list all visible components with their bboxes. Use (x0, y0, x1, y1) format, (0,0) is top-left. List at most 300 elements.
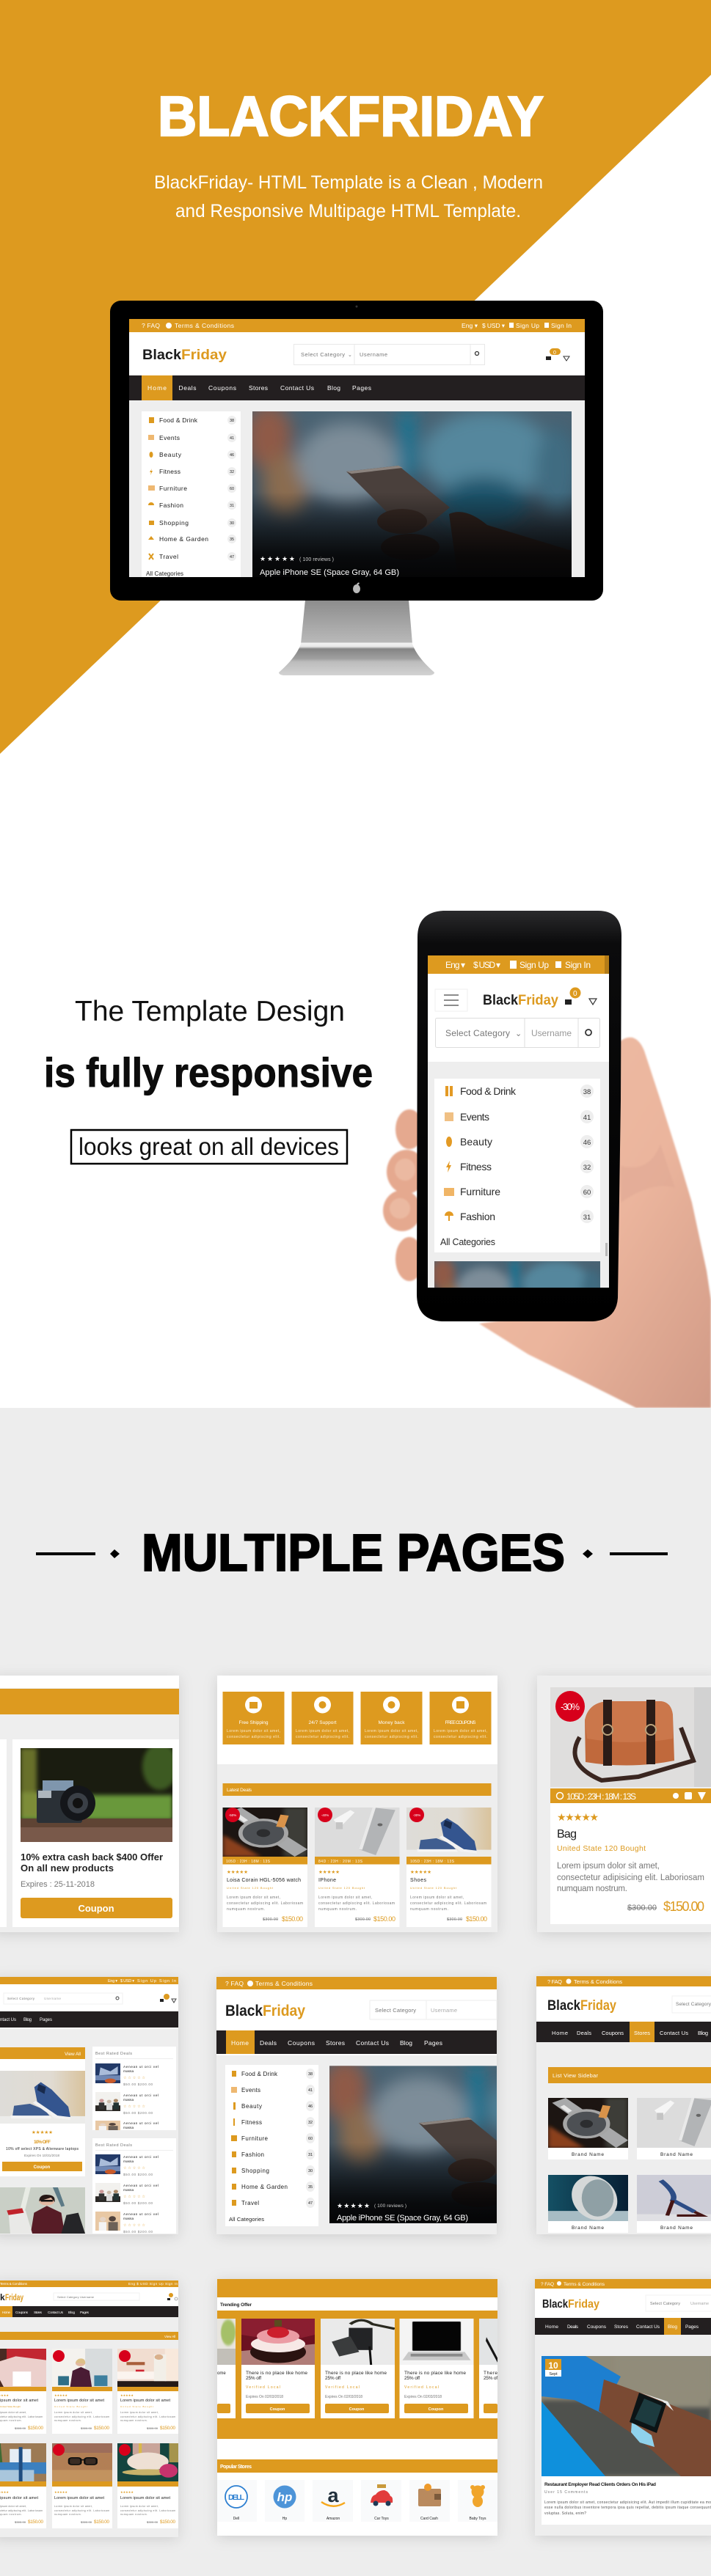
deal card: watch: 105D : 23H : 18M : 13S (226, 1860, 271, 1864)
deal card: watch: numquam nostrum. (227, 1907, 265, 1912)
phone category list: 46 (583, 1139, 591, 1147)
gold bar view all: View All (65, 2052, 81, 2057)
phone header: 0 (573, 990, 577, 998)
product info: United State 120 Bought (557, 1844, 646, 1853)
phone category list: 31 (583, 1214, 591, 1222)
coupon card: On all new products (21, 1863, 114, 1874)
category sidebar: Food & Drink (159, 417, 198, 424)
nav: Contact Us (660, 2030, 688, 2036)
gold bar (0, 2332, 178, 2340)
nav: Coupons (288, 2039, 315, 2047)
deal cards row 2: $150.00 (94, 2520, 109, 2525)
blog post card: voluptas. Soluta, enim? (544, 2511, 586, 2516)
offer card: dslr: Expires On 02/03/2018 (325, 2395, 362, 2399)
phone header (435, 987, 597, 1011)
best rated deals card 1: Aenean ut orci vel (123, 2094, 158, 2098)
navigation bar: Blog (327, 384, 340, 392)
page: deals with best rated sidebar (0, 1977, 178, 2234)
top bar: Eng $ USD Sign Up Sign In (128, 2282, 178, 2286)
best rated deals card 1: Aenean ut orci vel (123, 2121, 158, 2126)
header: Friday (5, 2292, 23, 2302)
page: home features and latest deals (217, 1676, 497, 1932)
date badge: 10 (548, 2360, 558, 2371)
top bar (216, 1977, 497, 1989)
category sidebar: Furniture (159, 485, 187, 492)
header: Black (547, 1998, 580, 2014)
top bar: ? FAQ (547, 1978, 562, 1985)
category sidebar: Shopping (159, 519, 189, 526)
nav: Blog (400, 2039, 412, 2047)
navigation bar: Contact Us (280, 384, 314, 392)
search (4, 1993, 176, 2004)
deal cards row 1: United State Bought (0, 2405, 21, 2408)
deal cards row 2: ctetur adipiscing elit. Laboriosam (0, 2509, 43, 2512)
best rated deals card 2: massa (123, 2189, 134, 2192)
top bar: Eng ▾ (462, 322, 478, 329)
date badge: Sept (549, 2372, 558, 2377)
category sidebar: 35 (230, 537, 234, 542)
product info: ★★★★★ (557, 1811, 599, 1823)
partial offer card left: ome (217, 2371, 226, 2376)
category sidebar: 46 (230, 453, 234, 458)
popular stores heading: Popular Stores (220, 2465, 252, 2470)
sidebar: 38 (308, 2072, 313, 2077)
coupon button (21, 1898, 172, 1918)
nav: Stores (614, 2324, 629, 2330)
deal card: shoes: United State 120 Bought (410, 1886, 457, 1890)
nav: Home (545, 2324, 558, 2330)
partial offer card right (479, 2319, 497, 2418)
top bar (129, 319, 585, 332)
deal card: watch: $150.00 (282, 1915, 303, 1923)
top bar: Terms & Conditions (175, 322, 234, 329)
offer card: laptop (399, 2319, 474, 2418)
brand cards (548, 2098, 711, 2233)
feature tiles: consectetur adipiscing elit. (434, 1735, 487, 1739)
header: Black (142, 348, 181, 363)
sidebar: Fashion (241, 2151, 264, 2158)
offer card: dslr: There is no place like home (325, 2371, 387, 2376)
nav: Pages (685, 2324, 699, 2330)
deal card: iphone: $150.00 (373, 1915, 395, 1923)
offer card: laptop: Coupon (429, 2407, 444, 2412)
phone category list: Beauty (460, 1136, 492, 1148)
category sidebar: Travel (159, 553, 178, 560)
deal cards row 2: numquam nostrum. (54, 2513, 81, 2516)
deal cards row 1: United State Bought (54, 2405, 87, 2408)
boxed line: looks great on all devices: looks great on all devices (79, 1133, 339, 1160)
store: dell: DELL (228, 2493, 245, 2502)
deal card: iphone: 84D : 23H : 20M : 13S (318, 1860, 363, 1864)
best rated deals card 2: massa (123, 2160, 134, 2164)
category sidebar: Beauty (159, 451, 182, 458)
nav: Stores (634, 2030, 650, 2036)
phone category list: Fashion (460, 1211, 495, 1222)
shoe offer card: 10% off select XPS & Alienware laptops (6, 2147, 79, 2151)
offer card: dslr: Coupon (349, 2407, 365, 2412)
blog post card: User 15 Comments (544, 2490, 588, 2495)
sidebar: 31 (308, 2153, 313, 2157)
latest deals bar (223, 1783, 492, 1796)
feature tiles: Lorem ipsum dolor sit amet, (365, 1729, 418, 1733)
store: amazon: a (327, 2484, 339, 2506)
deal cards row 1: $150.00 (28, 2426, 43, 2431)
feature tiles: Lorem ipsum dolor sit amet, (296, 1729, 349, 1733)
deal card: shoes: $300.00 (447, 1918, 462, 1922)
nav: Contact Us (356, 2039, 389, 2047)
deal cards row 1: consectetur adipiscing elit. Laboriosam (120, 2415, 175, 2418)
store: car toys: Car Toys (374, 2517, 389, 2521)
phone category list: Events (460, 1111, 489, 1123)
blog post card: esse nulla doloribus inventore tempora ipsa quis repellat, debitis ipsum itaque consequunt (544, 2506, 711, 2510)
page: deals with best rated sidebar: Sign Up (137, 1979, 156, 1984)
top bar: Terms & Conditions (255, 1980, 313, 1987)
best rated deals card 2: Best Rated Deals (95, 2143, 132, 2148)
page: stores list view (536, 1976, 711, 2234)
nav: Coupons (15, 2311, 29, 2315)
top bar: Terms & Conditions (0, 2282, 28, 2286)
deal card: shoes: numquam nostrum. (410, 1907, 448, 1912)
sidebar: Travel (241, 2200, 259, 2206)
sidebar: 41 (308, 2088, 313, 2093)
product info: Lorem ipsum dolor sit amet, (557, 1862, 660, 1871)
deal cards row 2: consectetur adipiscing elit. Laboriosam (120, 2509, 175, 2512)
trending offer heading: Trending Offer (220, 2302, 252, 2308)
trending band (217, 2311, 497, 2439)
shoe offer card: 10% OFF (34, 2140, 51, 2145)
category sidebar: 32 (230, 470, 234, 474)
blog post card (542, 2356, 711, 2525)
deal cards row 1: Lorem ipsum dolor sit amet, (54, 2411, 92, 2414)
best rated deals card 2: $50.00 $200.00 (123, 2230, 153, 2234)
nav: Blog (668, 2324, 677, 2330)
phone category list (434, 1079, 600, 1252)
deal card: shoes: consectetur adipiscing elit. Laboriosam (410, 1901, 486, 1906)
photo: woman shopping (0, 2187, 85, 2234)
deal cards row 1: $150.00 (160, 2426, 175, 2431)
phone top bar: $ USD ▾ (473, 960, 500, 970)
shoe offer card: ★★★★★ (32, 2130, 53, 2135)
sidebar: Home & Garden (241, 2184, 288, 2190)
offer card: dslr: 25% off (325, 2376, 340, 2381)
phone screen (428, 955, 609, 1346)
latest deals bar: Latest Deals (227, 1788, 252, 1793)
phone scrollbar (605, 1243, 608, 1256)
header: Select Category (650, 2302, 680, 2306)
category sidebar: Fashion (159, 502, 183, 509)
best rated deals card 1: Aenean ut orci vel (123, 2065, 158, 2069)
header: Friday (580, 1998, 616, 2014)
deal card: watch: Loisa Corain HGL-5056 watch (227, 1878, 301, 1883)
deal cards row 2: $150.00 (28, 2520, 43, 2525)
hero gold diagonal background (0, 0, 711, 754)
monitor stand (279, 600, 434, 675)
navigation bar: Pages (352, 384, 371, 392)
deal cards row 1: quam nostrum. (0, 2419, 22, 2422)
deal cards row 1: $150.00 (94, 2426, 109, 2431)
category sidebar: 31 (230, 504, 234, 508)
page: grid of deals (0, 2280, 178, 2537)
best rated deals card 2 (92, 2138, 176, 2234)
photo: camera (21, 1743, 178, 1842)
deal card: shoes: ★★★★★ (410, 1870, 431, 1875)
offer card: dslr (321, 2319, 395, 2418)
page: deals with best rated sidebar: Eng ▾ (108, 1979, 117, 1984)
shoe offer card: Coupon (34, 2165, 51, 2170)
line: the template design: The Template Design (75, 996, 345, 1027)
nav: Stores (34, 2311, 43, 2315)
phone header: Friday (518, 993, 558, 1008)
sidebar: Events (241, 2087, 260, 2094)
deal cards row 2: ipsum dolor sit amet (0, 2496, 38, 2500)
list view heading: List View Sidebar (553, 2072, 599, 2079)
deal cards row 2: Lorem ipsum dolor sit amet (54, 2496, 104, 2500)
product info: $150.00 (663, 1899, 704, 1914)
deal card: iphone: United State 120 Bought (318, 1886, 365, 1890)
best rated deals card 1 (92, 2047, 176, 2130)
category sidebar: Fitness (159, 468, 181, 475)
header: Username (431, 2007, 457, 2014)
deal card: shoes: $150.00 (466, 1915, 487, 1923)
page: trending offers and popular stores (217, 2279, 497, 2536)
popular stores heading (217, 2459, 497, 2473)
category sidebar: Home & Garden (159, 535, 208, 543)
coupon card: Expires : 25-11-2018 (21, 1880, 95, 1889)
countdown bar: 105D : 23H : 18M : 13S (566, 1791, 636, 1802)
header: Select Category (676, 2002, 711, 2007)
best rated deals card 1: massa (123, 2070, 134, 2074)
header: Username (360, 351, 387, 358)
nav: Deals (567, 2324, 579, 2330)
deal card: iphone: $300.00 (355, 1918, 371, 1922)
best rated deals card 1: ☆☆☆☆☆ (123, 2105, 146, 2109)
deal cards row 1: $300.00 (81, 2426, 92, 2430)
best rated deals card 1: $50.00 $200.00 (123, 2111, 153, 2115)
brand cards: Brand Name (572, 2225, 604, 2231)
sidebar: 32 (308, 2121, 313, 2125)
phone category list: Food & Drink (460, 1085, 517, 1097)
navigation bar: Stores (249, 384, 268, 392)
nav: Coupons (602, 2030, 624, 2036)
best rated deals card 1: massa (123, 2099, 134, 2102)
feature tiles: 24/7 Support (308, 1720, 337, 1725)
deal card: shoes: 105D : 23H : 18M : 13S (410, 1860, 455, 1864)
deal cards row 1: numquam nostrum. (54, 2419, 81, 2422)
apple logo (353, 582, 360, 593)
top bar (535, 2279, 711, 2289)
deal cards row 2: $300.00 (15, 2520, 26, 2524)
header: Select Category (375, 2007, 416, 2014)
deal cards row 1: consectetur adipiscing elit. Laboriosam (54, 2415, 109, 2418)
photo: bag (550, 1687, 711, 1787)
phone category list: 38 (583, 1088, 591, 1096)
store: dell: Dell (233, 2517, 239, 2521)
phone hero strip (434, 1261, 600, 1288)
top bar (0, 2280, 178, 2287)
store: amazon: Amazon (327, 2517, 340, 2521)
page: deals with best rated sidebar: $ USD ▾ (120, 1979, 134, 1984)
phone category list: 41 (583, 1114, 591, 1122)
hand holding phone (383, 911, 711, 1408)
store: baby toys (470, 2485, 486, 2521)
page: deals with best rated sidebar: Sign In (159, 1979, 176, 1984)
hand (383, 1038, 711, 1408)
hero: ★★★★★ (337, 2202, 370, 2209)
sidebar: All Categories (229, 2216, 264, 2223)
deal cards row 1: United State Bought (120, 2405, 153, 2408)
product info: consectetur adipisicing elit. Laboriosam (557, 1874, 704, 1882)
feature tiles (223, 1692, 492, 1744)
deal card: shoes (406, 1808, 492, 1927)
header: Friday (263, 2003, 305, 2019)
store: card cash: Card Cash (420, 2517, 438, 2521)
best rated deals card 2: ☆☆☆☆☆ (123, 2195, 146, 2199)
phone top bar: Sign In (565, 960, 591, 970)
best rated deals card 2: Aenean ut orci vel (123, 2155, 158, 2159)
navigation bar: Deals (179, 384, 197, 392)
gold bar view all (0, 2047, 85, 2059)
feature tiles: consectetur adipiscing elit. (296, 1735, 349, 1739)
top bar: ? FAQ (541, 2282, 554, 2287)
product info: Bag (557, 1828, 577, 1841)
deal card: iphone: numquam nostrum. (318, 1907, 357, 1912)
nav: Blog (698, 2030, 708, 2036)
best rated deals card 2: $50.00 $200.00 (123, 2201, 153, 2205)
category sidebar (142, 411, 241, 577)
subtitle: and Responsive Multipage HTML Template. (175, 201, 521, 221)
phone body (417, 911, 621, 1321)
photo: smartwatch on wrist (542, 2356, 711, 2476)
blog post card: Restaurant Employer Read Clients Orders On His iPad (544, 2482, 656, 2487)
gold band (0, 1689, 179, 1714)
shoe offer card: Expires On 10/31/2018 (24, 2154, 59, 2157)
feature tiles: Free Shipping (239, 1720, 269, 1725)
subtitle (154, 172, 543, 221)
deal cards row 1: Lorem ipsum dolor sit amet, (120, 2411, 158, 2414)
best rated deals card 2: Aenean ut orci vel (123, 2184, 158, 2188)
nav: Deals (260, 2039, 277, 2047)
partial offer card right: There (484, 2371, 497, 2376)
hero slide: ( 100 reviews ) (299, 557, 334, 562)
deal cards row 2: $300.00 (147, 2520, 158, 2524)
feature tiles: Money back (379, 1720, 405, 1725)
phone header: Black (483, 993, 518, 1008)
nav: Deals (577, 2030, 591, 2036)
deal cards row 1: ★★★★★ (54, 2393, 68, 2397)
sidebar: 30 (308, 2169, 313, 2173)
phone top bar (428, 955, 609, 974)
header (535, 2289, 711, 2318)
store: hp (273, 2486, 296, 2521)
best rated deals card 1: Best Rated Deals (95, 2052, 132, 2056)
header: Select Category Username (57, 2295, 95, 2299)
deal card: iphone (315, 1808, 399, 1927)
deal card: watch: -50% (229, 1813, 236, 1817)
best rated deals card 2: massa (123, 2217, 134, 2221)
offer card: cake (241, 2319, 315, 2418)
store: car toys (371, 2484, 393, 2521)
best rated deals card 2: $50.00 $200.00 (123, 2173, 153, 2176)
page: home hero (216, 1977, 640, 2234)
offer card: laptop: There is no place like home (404, 2371, 466, 2376)
deal cards row 1: $300.00 (15, 2426, 26, 2430)
deal card: iphone: ★★★★★ (318, 1870, 340, 1875)
offer card: cake: Coupon (270, 2407, 285, 2412)
deal cards row 2: ★★★★★ (120, 2490, 134, 2494)
header: k (0, 2292, 5, 2302)
sidebar: Food & Drink (241, 2071, 278, 2077)
nav (0, 2011, 178, 2028)
phone category list: 32 (583, 1164, 591, 1172)
category sidebar: 30 (230, 521, 234, 526)
screen (129, 319, 585, 577)
hero: Apple iPhone SE (Space Gray, 64 GB) (337, 2214, 468, 2223)
line: is fully responsive: is fully responsive (44, 1049, 373, 1096)
top bar: ? FAQ (142, 322, 160, 329)
nav (536, 2022, 711, 2042)
store: dell (225, 2486, 247, 2521)
offer card: cake: 25% off (246, 2376, 261, 2381)
deal cards row 2: quam nostrum. (0, 2513, 22, 2516)
subtitle: BlackFriday- HTML Template is a Clean , Modern (154, 172, 543, 193)
deal card: watch: consectetur adipiscing elit. Laboriosam (227, 1901, 303, 1906)
gold bar: View All (164, 2335, 175, 2338)
date badge (545, 2359, 561, 2377)
page: product detail (537, 1676, 711, 1932)
deal card: shoes: Lorem ipsum dolor sit amet, (410, 1896, 464, 1900)
brand cards: Brand Name (572, 2152, 604, 2157)
feature tiles: FREE COUPONS (445, 1720, 476, 1725)
offer card: laptop: 25% off (404, 2376, 420, 2381)
hero slide: ★★★★★ (260, 555, 295, 562)
deal cards row 1: ctetur adipiscing elit. Laboriosam (0, 2415, 43, 2418)
title: BLACKFRIDAY (158, 85, 544, 148)
deal cards row 1: $300.00 (147, 2426, 158, 2430)
offer card: dslr: Verified Local (325, 2385, 360, 2390)
category sidebar: 41 (230, 436, 234, 441)
deal cards row 2 (0, 2443, 178, 2528)
header: Black (542, 2298, 568, 2311)
best rated deals card 1: massa (123, 2127, 134, 2130)
deal card: watch: ★★★★★ (227, 1870, 248, 1875)
search: Username (44, 1997, 61, 2000)
top bar: Terms & Conditions (564, 2282, 605, 2287)
deal cards row 2: $150.00 (160, 2520, 175, 2525)
deal cards row 1: ★★★★★ (120, 2393, 134, 2397)
nav: Pages (40, 2018, 52, 2022)
deal card: iphone: IPhone (318, 1878, 336, 1883)
hero (323, 2059, 640, 2223)
product info (550, 1803, 711, 1924)
deal card: iphone: Lorem ipsum dolor sit amet, (318, 1896, 372, 1900)
deal cards row 1: numquam nostrum. (120, 2419, 147, 2422)
phone search (436, 1018, 600, 1047)
deal cards row 2: Lorem ipsum dolor sit amet, (54, 2505, 92, 2508)
offer card: cake: There is no place like home (246, 2371, 307, 2376)
header (129, 332, 585, 375)
top bar: $ USD ▾ (482, 322, 506, 329)
sidebar: Furniture (241, 2135, 269, 2142)
discount badge (555, 1691, 585, 1722)
monitor bezel (110, 301, 603, 601)
offer card: cake: Expires On 02/03/2018 (246, 2395, 283, 2399)
product info: numquam nostrum. (557, 1885, 627, 1893)
store: hp: Hp (282, 2517, 287, 2521)
header: Select Category (301, 351, 345, 358)
deal cards row 1: Lorem ipsum dolor sit amet (120, 2399, 170, 2403)
sidebar: Shopping (241, 2168, 269, 2174)
sidebar: Fitness (241, 2119, 262, 2126)
